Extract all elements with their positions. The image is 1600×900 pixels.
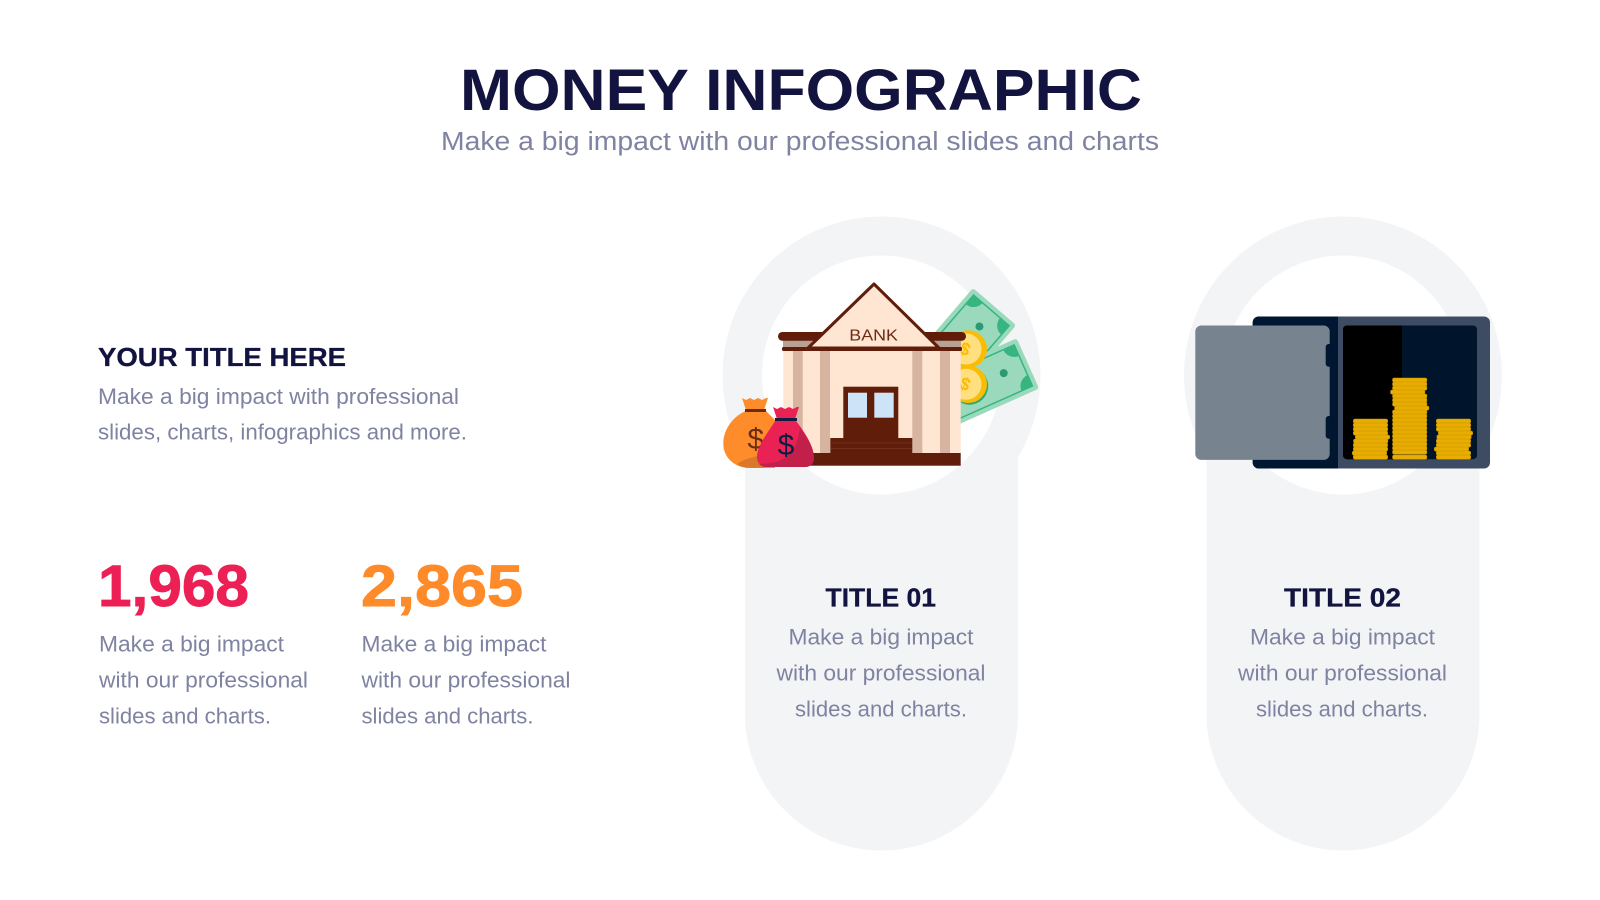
- stat text red: slides and charts.: [99, 704, 271, 728]
- card body 02: Make a big impact: [1250, 624, 1435, 650]
- icon: gold coins: $: [956, 338, 974, 360]
- safe door: [1195, 326, 1333, 460]
- stat number orange: 2,865: [361, 554, 523, 619]
- stat: 2,865: [360, 554, 570, 728]
- card body 01: with our professional: [775, 660, 986, 686]
- panel: intro text: [98, 342, 467, 444]
- coin stack middle: [1390, 378, 1429, 459]
- stat text orange: Make a big impact: [362, 632, 546, 656]
- card text: title 02: [1237, 583, 1447, 722]
- card body 01: Make a big impact: [788, 624, 974, 650]
- intro body text: Make a big impact with professional: [98, 384, 459, 409]
- card heading 01: TITLE 01: [826, 583, 936, 613]
- title: MONEY INFOGRAPHIC: [460, 58, 1142, 123]
- intro heading: YOUR TITLE HERE: [98, 342, 346, 372]
- icon: orange money bag: $: [747, 423, 764, 456]
- icon: open safe with coins: [1195, 316, 1490, 468]
- icon: red money bag: [757, 407, 814, 467]
- card body 02: slides and charts.: [1256, 696, 1428, 722]
- stat text orange: slides and charts.: [362, 704, 534, 728]
- coin stack right: [1434, 419, 1473, 459]
- intro body text: slides, charts, infographics and more.: [98, 420, 467, 444]
- card body 01: [775, 624, 986, 722]
- icon: banknote front: [960, 339, 1038, 424]
- intro body text: [98, 384, 467, 444]
- stat text red: Make a big impact: [99, 632, 284, 656]
- card body 01: slides and charts.: [795, 696, 967, 722]
- icon: gold coins: $: [956, 373, 974, 395]
- icon: bank with money: [723, 278, 1048, 468]
- coin stack left: [1352, 419, 1390, 459]
- stat text red: with our professional: [98, 668, 308, 692]
- subtitle: Make a big impact with our professional slides and charts: [441, 128, 1159, 156]
- stat number red: 1,968: [98, 554, 249, 619]
- stat text orange: [360, 632, 570, 728]
- stat: 1,968: [98, 554, 308, 728]
- icon: gold coins: [950, 330, 988, 405]
- bank label: BANK: [849, 328, 898, 345]
- card text: title 01: [775, 583, 986, 722]
- icon: red money bag: $: [778, 429, 795, 462]
- panel: title 01 background: [722, 216, 1040, 850]
- safe body: [1253, 316, 1490, 468]
- icon: orange money bag: [723, 398, 775, 468]
- panel: title 02 background: [1184, 216, 1502, 850]
- card heading 02: TITLE 02: [1284, 583, 1401, 613]
- card body 02: [1237, 624, 1447, 722]
- card body 02: with our professional: [1237, 660, 1447, 686]
- icon: banknote back: [935, 289, 1015, 352]
- icon: bank building: [778, 284, 966, 466]
- stat text orange: with our professional: [360, 668, 570, 692]
- stat text red: [98, 632, 308, 728]
